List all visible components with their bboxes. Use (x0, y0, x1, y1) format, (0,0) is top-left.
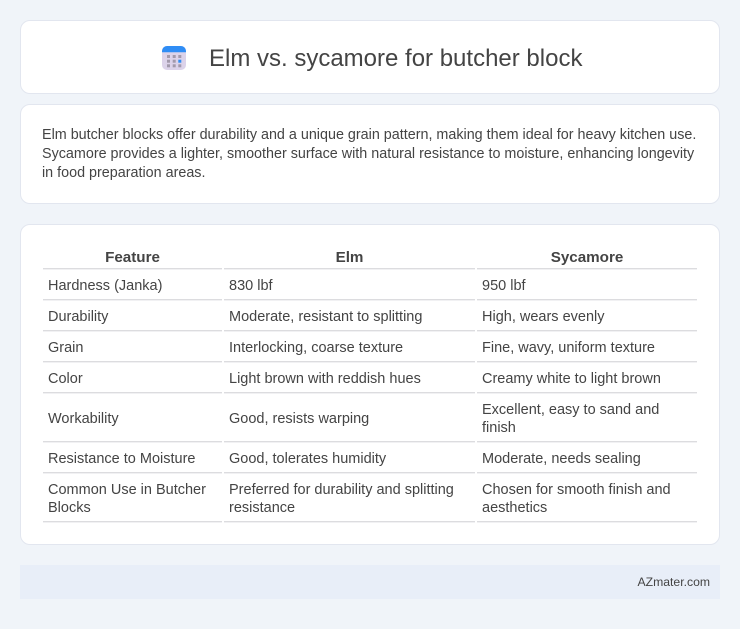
footer credit: AZmater.com (638, 575, 710, 589)
intro text: in food preparation areas. (42, 165, 205, 181)
row: common use: Blocks (48, 500, 91, 516)
row: common use: Common Use in Butcher (48, 482, 206, 498)
comparison table: Moderate, needs sealing (482, 451, 641, 467)
comparison table: resistance (229, 500, 295, 516)
comparison table: 830 lbf (229, 278, 273, 294)
title panel (20, 20, 720, 94)
comparison table: Moderate, resistant to splitting (229, 309, 422, 325)
header: Feature: Feature (105, 249, 160, 266)
comparison table: Light brown with reddish hues (229, 371, 421, 387)
table panel (20, 224, 720, 545)
comparison table: Fine, wavy, uniform texture (482, 340, 655, 356)
header: Sycamore: Sycamore (551, 249, 623, 266)
header: Elm: Elm (336, 249, 363, 266)
comparison table: Good, resists warping (229, 411, 369, 427)
comparison table: Creamy white to light brown (482, 371, 661, 387)
row: color: Color (48, 371, 83, 387)
row: durability: Durability (48, 309, 108, 325)
intro text: Elm butcher blocks offer durability and a unique grain pattern, making them ideal for heavy kitchen use. (42, 127, 696, 143)
comparison table: aesthetics (482, 500, 547, 516)
icon: calendar (162, 46, 186, 70)
intro panel (20, 104, 720, 204)
comparison table: High, wears evenly (482, 309, 604, 325)
row: workability: Workability (48, 411, 119, 427)
comparison table: Preferred for durability and splitting (229, 482, 454, 498)
title: Elm vs. sycamore for butcher block (209, 45, 582, 72)
intro text: Sycamore provides a lighter, smoother surface with natural resistance to moisture, enhancing longevity (42, 146, 694, 162)
comparison table: finish (482, 420, 516, 436)
comparison table: Chosen for smooth finish and (482, 482, 671, 498)
comparison table: Interlocking, coarse texture (229, 340, 403, 356)
row: grain: Grain (48, 340, 83, 356)
row: common use (48, 482, 206, 516)
footer bar (20, 565, 720, 599)
row: moisture: Resistance to Moisture (48, 451, 195, 467)
intro text (42, 127, 696, 181)
comparison table: Good, tolerates humidity (229, 451, 386, 467)
comparison table: Excellent, easy to sand and (482, 402, 659, 418)
comparison table: 950 lbf (482, 278, 526, 294)
row: hardness: Hardness (Janka) (48, 278, 162, 294)
